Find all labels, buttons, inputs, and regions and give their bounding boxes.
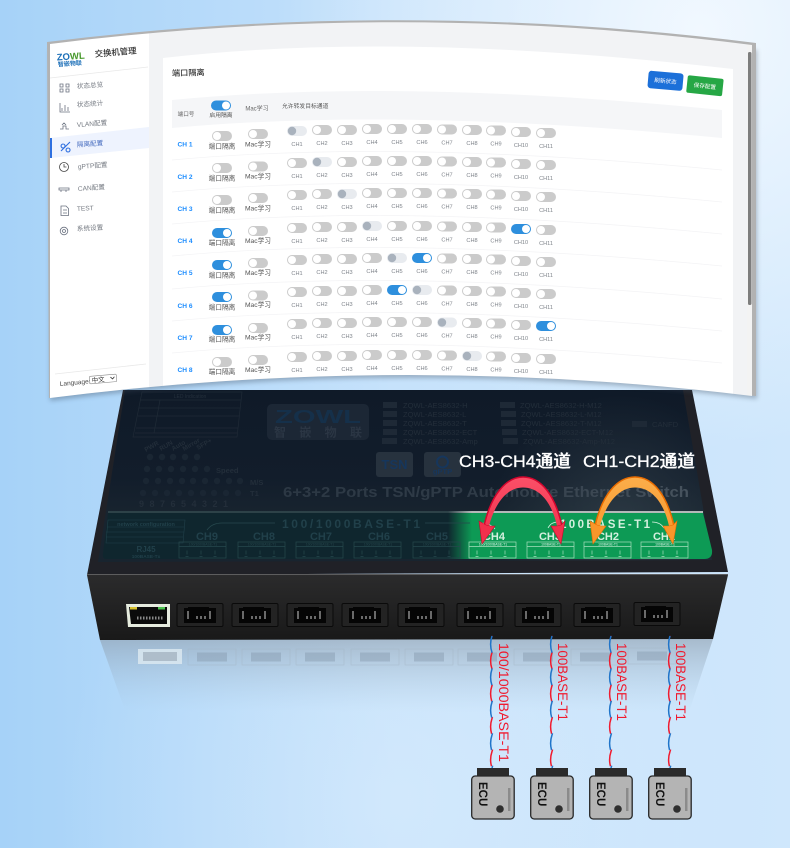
LED labels: SFP+: [196, 437, 213, 452]
column CH7: CH7: [441, 270, 453, 276]
menu items: [77, 80, 108, 233]
port names: CH 3: [177, 206, 193, 213]
port names: CH 4: [177, 238, 193, 245]
column CH10: CH10: [514, 304, 528, 310]
column CH11: CH11: [539, 208, 553, 214]
column CH10: CH10: [514, 336, 528, 342]
column CH4: CH4: [366, 140, 378, 146]
ECU 3: [590, 768, 632, 819]
column CH7: CH7: [441, 302, 453, 308]
model list: ZQWL-AES8632-Amp-M12: [523, 437, 615, 446]
LED labels: PWR: [144, 440, 160, 454]
column CH3: CH3: [341, 270, 353, 276]
column CH4: CH4: [366, 333, 378, 339]
row dividers: [172, 152, 722, 363]
port names: CH 6: [177, 303, 193, 310]
column CH9: CH9: [490, 206, 502, 212]
column CH1: CH1: [291, 303, 303, 309]
window shadow: [50, 28, 757, 401]
green port panel: [103, 511, 712, 560]
column CH4: [362, 124, 382, 372]
network configuration box: RJ45: [136, 545, 156, 554]
column CH6: CH6: [416, 333, 428, 339]
port names: CH 2: [177, 174, 193, 181]
column CH3: CH3: [341, 238, 353, 244]
column CH5: CH5: [391, 366, 403, 372]
LED indication table: LED Indication: [174, 394, 206, 400]
mac learning toggles: Mac学习: [245, 300, 271, 309]
terminal boxes: 100BASE-T1: [598, 543, 618, 547]
table header: 允许转发目标通道: [282, 102, 329, 110]
main card: [163, 47, 733, 400]
language selector: 中文: [91, 375, 105, 385]
column CH6: CH6: [416, 237, 428, 243]
channel labels: CH5: [426, 531, 448, 543]
table header: 端口号: [178, 110, 195, 118]
column CH5: CH5: [391, 204, 403, 210]
save button: [686, 75, 724, 96]
column CH5: CH5: [391, 172, 403, 178]
column CH6: CH6: [416, 204, 428, 210]
menu items: 状态统计: [77, 98, 104, 109]
column CH1: CH1: [291, 239, 303, 245]
save button: 保存配置: [693, 81, 717, 91]
refresh button: 刷新状态: [654, 76, 677, 86]
ECU 2: ECU: [535, 782, 547, 806]
column CH3: [337, 125, 357, 373]
cable label 100BASE-T1 CH1: 100BASE-T1: [673, 643, 689, 721]
port isolation toggles: 端口隔离: [209, 206, 236, 214]
channel label CH3-CH4: CH3-CH4通道: [459, 452, 571, 471]
cable label 100BASE-T1 CH2: 100BASE-T1: [614, 643, 630, 721]
device logo: ZOWL: [275, 407, 361, 427]
terminal boxes: 100/1000BASE-T1: [306, 543, 334, 547]
column CH7: CH7: [441, 366, 453, 372]
device logo: 智嵌物联: [274, 424, 362, 440]
column CH6: CH6: [416, 269, 428, 275]
column CH9: CH9: [490, 368, 502, 374]
column CH8: CH8: [466, 367, 478, 373]
column CH1: [287, 126, 307, 374]
column CH10: CH10: [514, 143, 528, 149]
column CH7: CH7: [441, 238, 453, 244]
column CH3: CH3: [341, 334, 353, 340]
cable CH2: [610, 636, 612, 768]
column CH2: CH2: [316, 367, 328, 373]
column CH11: CH11: [539, 176, 553, 182]
column CH9: CH9: [490, 334, 502, 340]
mac learning toggles: Mac学习: [245, 140, 271, 148]
column CH4: CH4: [366, 269, 378, 275]
column CH8: [462, 125, 482, 373]
column CH5: [387, 124, 407, 372]
model list: ZQWL-AES8632-Amp: [403, 437, 478, 446]
card title: 端口隔离: [172, 67, 205, 78]
column CH2: CH2: [316, 302, 328, 308]
ECU 2: [531, 768, 573, 819]
column CH7: CH7: [441, 140, 453, 146]
model list: CANFD: [652, 420, 679, 429]
column CH5: CH5: [391, 269, 403, 275]
model list: ZQWL-AES8632-ECT: [403, 428, 478, 437]
channel labels: CH6: [368, 531, 390, 543]
TSN badge: [376, 452, 413, 477]
column CH11: CH11: [539, 370, 553, 376]
cable CH4: [491, 636, 493, 768]
LED labels: T1: [250, 489, 259, 498]
column CH1: CH1: [291, 206, 303, 212]
menu items: CAN配置: [78, 183, 106, 193]
channel labels: [196, 531, 675, 543]
column CH2: CH2: [316, 238, 328, 244]
sidebar title: 交换机管理: [94, 45, 138, 59]
terminal boxes: 100/1000BASE-T1: [189, 543, 217, 547]
column CH2: CH2: [316, 173, 328, 179]
column CH5: CH5: [391, 333, 403, 339]
port isolation toggles: 端口隔离: [209, 142, 236, 150]
port isolation toggles: 端口隔离: [209, 238, 236, 247]
column CH1: CH1: [291, 335, 303, 341]
gPTP badge: [424, 452, 461, 477]
column CH4: CH4: [366, 301, 378, 307]
port isolation toggles: [209, 131, 236, 376]
menu items: VLAN配置: [77, 119, 108, 129]
channel labels: CH9: [196, 531, 218, 543]
column CH2: CH2: [316, 141, 328, 147]
column CH6: CH6: [416, 172, 428, 178]
column CH5: CH5: [391, 301, 403, 307]
column CH3: CH3: [341, 141, 353, 147]
model list: ZQWL-AES8632-H: [403, 401, 468, 410]
table header: [172, 91, 722, 138]
cable label 100/1000BASE-T1: 100/1000BASE-T1: [496, 643, 512, 762]
arrow: CH3-CH4 red link: [479, 477, 565, 544]
forwarding matrix: [287, 124, 556, 376]
ECU 4: ECU: [653, 782, 665, 806]
menu icons: [59, 84, 70, 235]
terminal boxes: 100/1000BASE-T1: [423, 543, 451, 547]
ECU 4: [649, 768, 691, 819]
menu items: gPTP配置: [78, 161, 108, 171]
column CH9: CH9: [490, 142, 502, 148]
menu items: 系统设置: [77, 223, 104, 233]
mac learning toggles: [245, 129, 271, 374]
refresh button: [647, 71, 684, 91]
column CH9: [486, 126, 506, 374]
port names: CH 1: [177, 142, 193, 148]
column CH11: CH11: [539, 305, 553, 311]
section header 100/1000BASE-T1: 100/1000BASE-T1: [282, 517, 420, 531]
LED labels: Auto: [170, 439, 187, 453]
mac learning toggles: Mac学习: [245, 204, 271, 212]
column CH9: CH9: [490, 302, 502, 308]
port isolation toggles: 端口隔离: [209, 174, 236, 182]
channel labels: CH4: [483, 531, 506, 543]
mac learning toggles: Mac学习: [245, 268, 271, 277]
column CH6: [412, 124, 432, 372]
logo: 智嵌物联: [58, 59, 82, 68]
device logo: [267, 404, 369, 440]
channel labels: CH3: [539, 531, 561, 543]
cable label 100BASE-T1 CH3: 100BASE-T1: [555, 643, 571, 721]
product title: 6+3+2 Ports TSN/gPTP Automotive Ethernet Switch: [283, 485, 689, 501]
mac learning toggles: Mac学习: [245, 172, 271, 180]
column CH5: CH5: [391, 237, 403, 243]
active menu highlight: [50, 127, 149, 158]
terminal boxes: 100/1000BASE-T1: [479, 543, 507, 547]
column CH8: CH8: [466, 238, 478, 244]
switch device: [87, 390, 728, 730]
terminal boxes: 100BASE-T1: [541, 543, 561, 547]
column CH7: [437, 124, 457, 372]
column CH2: CH2: [316, 270, 328, 276]
port names: [177, 142, 193, 374]
model list: ZQWL-AES8632-T: [403, 419, 467, 428]
mac learning toggles: Mac学习: [245, 236, 271, 245]
status LEDs: [140, 454, 243, 496]
scrollbar: [748, 52, 752, 305]
model list: ZQWL-AES8632-ECT-M12: [522, 428, 613, 437]
language selector: [60, 374, 117, 386]
column CH10: CH10: [514, 369, 528, 375]
LED labels: Mirror: [182, 437, 202, 453]
TSN badge: TSN: [382, 457, 408, 472]
column CH3: CH3: [341, 302, 353, 308]
column CH4: CH4: [366, 204, 378, 210]
column CH9: CH9: [490, 270, 502, 276]
curved web UI window: [47, 0, 756, 400]
channel label CH1-CH2: CH1-CH2通道: [583, 452, 695, 471]
mac learning toggles: Mac学习: [245, 332, 271, 342]
LED labels: [139, 437, 263, 509]
column CH7: CH7: [441, 334, 453, 340]
T1 ports: [177, 602, 680, 626]
channel labels: CH2: [597, 531, 619, 543]
column CH1: CH1: [291, 368, 303, 374]
ECU 1: ECU: [476, 782, 488, 806]
channel labels: CH1: [653, 531, 675, 543]
RJ45 port: [126, 604, 170, 627]
LED labels: Speed: [216, 466, 239, 475]
column CH6: CH6: [416, 301, 428, 307]
menu items: 状态总览: [77, 80, 104, 90]
device top surface: [87, 390, 728, 575]
column CH10: CH10: [514, 240, 528, 246]
column CH10: CH10: [514, 272, 528, 278]
sidebar: [50, 0, 149, 400]
column CH3: CH3: [341, 173, 353, 179]
column CH8: CH8: [466, 173, 478, 179]
column CH3: CH3: [341, 205, 353, 211]
column CH10: CH10: [514, 207, 528, 213]
LED labels: RUN: [158, 439, 174, 453]
column CH8: CH8: [466, 205, 478, 211]
column CH11: CH11: [539, 273, 553, 279]
LED indication table: [133, 392, 242, 437]
column CH1: CH1: [291, 174, 303, 180]
column CH9: CH9: [490, 238, 502, 244]
column CH8: CH8: [466, 302, 478, 308]
model list: ZQWL-AES8632-H-M12: [520, 401, 602, 410]
column CH8: CH8: [466, 270, 478, 276]
column CH2: CH2: [316, 334, 328, 340]
port names: CH 5: [177, 270, 193, 277]
device front face: [87, 574, 728, 640]
port isolation toggles: 端口隔离: [209, 334, 236, 344]
column CH8: CH8: [466, 141, 478, 147]
model list: [382, 401, 679, 446]
cable CH1: [669, 636, 671, 768]
terminal boxes: 100/1000BASE-T1: [248, 543, 276, 547]
column CH7: CH7: [441, 204, 453, 210]
network configuration box: network configuration: [117, 522, 176, 528]
column CH9: CH9: [490, 174, 502, 180]
arrow: CH1-CH2 orange link: [590, 477, 677, 544]
column CH6: CH6: [416, 140, 428, 146]
table header: 启用隔离: [209, 111, 233, 119]
section header 100BASE-T1: 100BASE-T1: [560, 519, 651, 531]
table header: Mac学习: [245, 104, 269, 112]
column CH3: CH3: [341, 367, 353, 373]
column CH6: CH6: [416, 366, 428, 372]
channel labels: CH8: [253, 531, 275, 543]
column CH11: CH11: [539, 337, 553, 343]
model list: ZQWL-AES8632-T-M12: [521, 419, 602, 428]
column CH4: CH4: [366, 237, 378, 243]
column CH11: [536, 128, 556, 376]
column CH10: [511, 127, 531, 375]
column CH1: CH1: [291, 142, 303, 148]
section header 100/1000BASE-T1: [207, 517, 495, 531]
LED labels: 987654321: [139, 499, 234, 509]
port isolation toggles: 端口隔离: [209, 302, 236, 312]
network configuration box: 100BASE-Tx: [132, 554, 161, 560]
menu items: TEST: [77, 205, 94, 213]
port names: CH 7: [177, 335, 193, 342]
mac learning toggles: Mac学习: [245, 365, 271, 374]
menu items: 隔离配置: [77, 138, 104, 149]
device reflection: [100, 639, 713, 730]
port isolation toggles: 端口隔离: [209, 270, 236, 280]
column CH10: CH10: [514, 175, 528, 181]
column CH2: [312, 125, 332, 373]
ECU 1: [472, 768, 514, 819]
terminal boxes: 100BASE-T1: [655, 543, 675, 547]
ECU 3: ECU: [594, 782, 606, 806]
column CH4: CH4: [366, 172, 378, 178]
cable CH3: [551, 636, 553, 768]
logo: [57, 52, 85, 67]
terminal boxes: [179, 542, 688, 558]
column CH8: CH8: [466, 334, 478, 340]
column CH5: CH5: [391, 140, 403, 146]
column CH11: CH11: [539, 241, 553, 247]
model list: ZQWL-AES8632-L: [403, 410, 466, 419]
port isolation toggles: 端口隔离: [209, 367, 236, 376]
logo: ZOWL: [56, 51, 85, 63]
column CH7: CH7: [441, 172, 453, 178]
column CH1: CH1: [291, 271, 303, 277]
gPTP badge: gPTP: [433, 467, 452, 476]
port names: CH 8: [177, 367, 193, 374]
channel labels: CH7: [310, 531, 332, 543]
terminal boxes: 100/1000BASE-T1: [364, 543, 392, 547]
network configuration box: [106, 520, 185, 560]
model list: ZQWL-AES8632-L-M12: [521, 410, 602, 419]
column CH11: CH11: [539, 144, 553, 150]
column CH4: CH4: [366, 366, 378, 372]
LED labels: M/S: [250, 478, 263, 487]
language selector: Language:: [60, 378, 91, 388]
column CH2: CH2: [316, 205, 328, 211]
